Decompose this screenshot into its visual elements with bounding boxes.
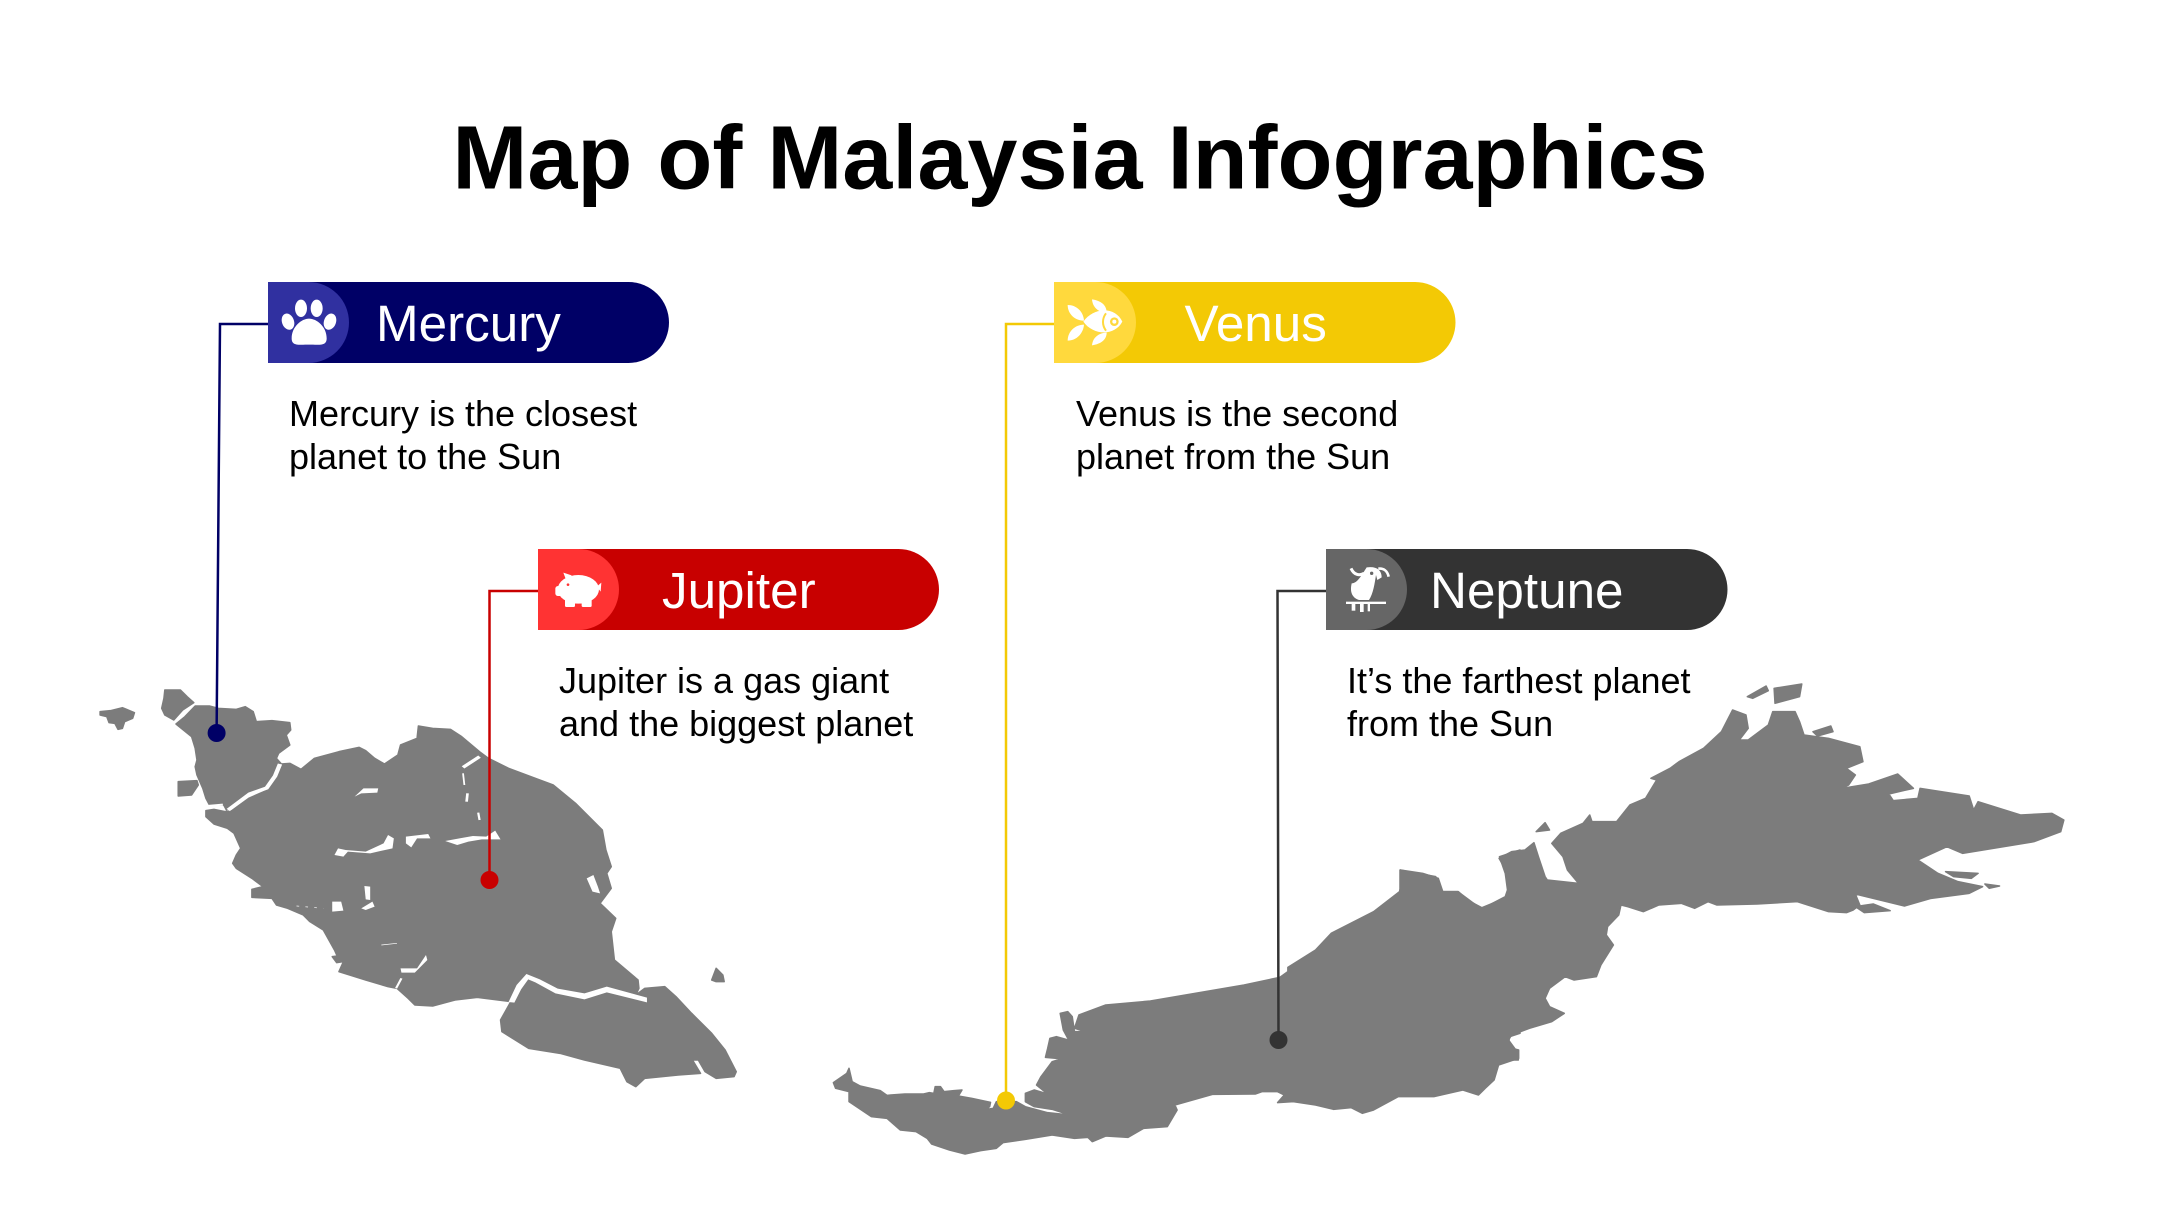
label pill: Mercury [268,282,669,363]
description: Venus: planet from the Sun [1076,436,1390,477]
label pill: Neptune: Neptune [1430,562,1624,619]
panel: Venus [1054,282,1456,477]
panel: Neptune [1326,549,1728,744]
map: Sabah [1400,684,2064,1060]
description: Mercury: Mercury is the closest [289,393,637,434]
description: Mercury: planet to the Sun [289,436,561,477]
label pill: Jupiter: Jupiter [662,562,816,619]
icon: fish [1068,299,1122,345]
label pill: Neptune [1326,549,1728,630]
label pill: Venus [1054,282,1456,363]
label pill: Jupiter [538,549,939,630]
icon: parrot [1346,567,1389,612]
label pill: Mercury: Mercury [376,295,561,352]
connector: Venus [997,324,1054,1110]
connector: Jupiter [480,591,538,889]
description: Neptune: It’s the farthest planet [1347,660,1691,701]
map of Malaysia [100,684,2064,1154]
map: Sarawak [833,850,1520,1154]
description: Venus: Venus is the second [1076,393,1398,434]
panel: Jupiter [538,549,939,744]
label pill: Venus: Venus [1184,295,1327,352]
icon: paw [280,300,338,345]
connector: Neptune [1270,591,1326,1049]
panel: Mercury [268,282,669,477]
title: Map of Malaysia Infographics [452,108,1708,208]
icon: piggy [555,573,601,607]
connector: Mercury [208,324,268,742]
map: Peninsular Malaysia [100,690,736,1087]
description: Neptune: from the Sun [1347,703,1553,744]
description: Jupiter: Jupiter is a gas giant [559,660,889,701]
description: Jupiter: and the biggest planet [559,703,913,744]
